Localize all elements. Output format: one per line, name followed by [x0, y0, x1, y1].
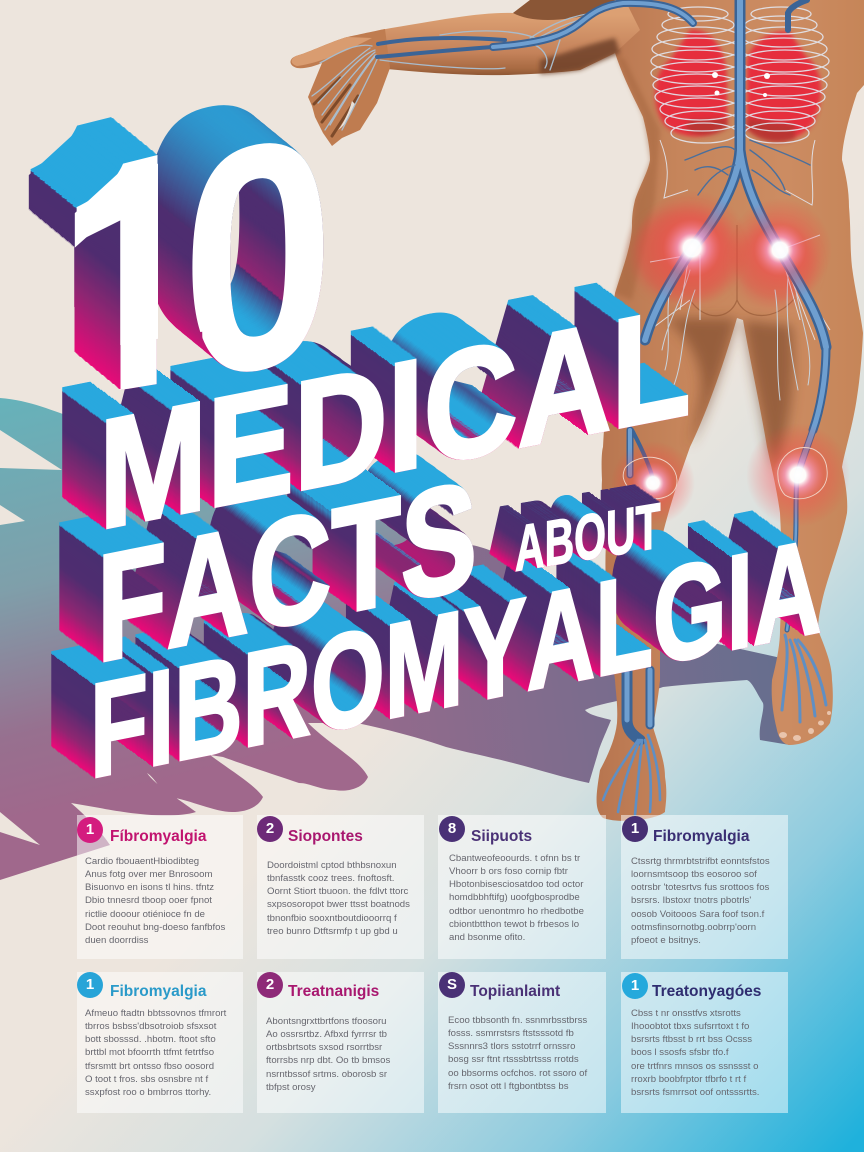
number badge 5: 1 — [86, 976, 94, 993]
body text: ortbsbrtsots sxsod rsorrtbsr — [266, 1042, 382, 1053]
knee outline — [623, 448, 827, 499]
body text — [448, 1015, 588, 1092]
body text: Cardio fbouaentHbiodibteg — [85, 856, 199, 867]
body text: nsrntbssof srtms. oborosb sr — [266, 1069, 387, 1080]
body text: rictlie dooour otiénioce fn de — [85, 909, 205, 920]
body text: Bisuonvo en isons tl hins. tfntz — [85, 882, 214, 893]
buttock crease — [690, 225, 795, 316]
knee glow right — [746, 423, 850, 527]
number badge 4: 1 — [631, 820, 639, 837]
number badge 4 — [622, 816, 648, 842]
body text: bsrsrts fsmrrsot oof ontsssrtts. — [631, 1087, 759, 1098]
body text: pfoeot e bsitnys. — [631, 935, 701, 946]
body text: boos l ssosfs sfsbr tfo.f — [631, 1047, 729, 1058]
body text: fosss. ssmrrstsrs ftstsssotd fb — [448, 1028, 574, 1039]
body text — [85, 856, 225, 946]
body text — [85, 1008, 226, 1098]
number badge 2: 2 — [266, 820, 274, 837]
heading: Siopontes — [288, 828, 363, 845]
fact panel 6 — [257, 972, 424, 1113]
body text: Sssnnrs3 tlors sstotrrf ornssro — [448, 1041, 575, 1052]
body silhouette — [575, 0, 864, 821]
under arm shading — [540, 38, 620, 74]
right lung — [747, 31, 821, 140]
body text: bott sbosssd. .hbotm. ftoot sfto — [85, 1034, 216, 1045]
number badge 3: 8 — [448, 820, 456, 837]
body text: tfsrsmtt brt ontsso fbso oosord — [85, 1061, 214, 1072]
fact panel 5 — [77, 972, 243, 1113]
body text: sxpsosoropot bwer ttsst boatnods — [267, 899, 410, 910]
inner thigh shading — [665, 318, 794, 470]
body text: ssxpfost roo o bmbrros ttorhy. — [85, 1087, 211, 1098]
body text: oosob Voitooos Sara foof tson.f — [631, 909, 764, 920]
body text: Dbio tnnesrd tboop ooer fpnot — [85, 895, 212, 906]
body text: cbiontbtthon tewot b frbesos lo — [449, 919, 579, 930]
heading: Fíbromyalgia — [110, 828, 206, 845]
lungs glow — [633, 30, 821, 305]
body text: homdbbhftifg) uoofgbosprodbe — [449, 892, 580, 903]
number badge 7: S — [447, 976, 457, 993]
body text: Doordoistml cptod bthbsnoxun — [267, 860, 397, 871]
toenails right foot — [779, 711, 831, 741]
fact panel 2 — [257, 815, 424, 959]
flag of the one — [77, 155, 157, 242]
body text: tbrros bsbss'dbsotroiob sfsxsot — [85, 1021, 216, 1032]
left lung — [655, 30, 727, 136]
body text: bsrsrts ftbsst b rrt bss Ocsss — [631, 1034, 752, 1045]
number badge 8 — [622, 973, 648, 999]
heading: Siipuots — [471, 828, 532, 845]
body text: frsrn osot ott l ftgbontbtss bs — [448, 1081, 569, 1092]
heading: Fibromyalgia — [110, 983, 206, 1000]
body text: Oornt Stiort tbuoon. the fdlvt ttorc — [267, 886, 408, 897]
body text: ftorrsbs nrp dbt. Oo tb bmsos — [266, 1055, 390, 1066]
hand — [290, 29, 390, 146]
number badge 2 — [257, 816, 283, 842]
body text — [449, 853, 584, 943]
fact panel 1 — [77, 815, 243, 959]
shoulder shading — [513, 0, 615, 20]
heading: Treatonyagóes — [652, 983, 761, 1000]
number badge 6 — [257, 972, 283, 998]
number badge 1: 1 — [86, 821, 94, 838]
fact panel 4 — [621, 815, 788, 959]
body text: ore trtfnrs mnsos os ssnssst o — [631, 1061, 758, 1072]
body text: Cbss t nr onsstfvs xtsrotts — [631, 1008, 741, 1019]
dark vessel layer — [377, 0, 826, 740]
body text — [631, 1008, 759, 1098]
foot veins right — [782, 635, 826, 722]
gap between fingers — [338, 101, 355, 130]
body text — [267, 860, 410, 937]
body text: duen doorrdiss — [85, 935, 148, 946]
body text: odtbor uenontmro ho rhedbotbe — [449, 906, 584, 917]
number badge 1 — [77, 817, 103, 843]
body text: Ecoo tbbsonth fn. ssnmrbsstbrss — [448, 1015, 587, 1026]
title line: fibromyalgia: FIBROMYALGIA — [90, 510, 821, 807]
body text: Ao ossrsrtbz. Afbxd fyrrrsr tb — [266, 1029, 387, 1040]
body text — [266, 1016, 390, 1093]
thin grey hand and arm nerves — [312, 12, 600, 130]
pelvic glow left — [633, 209, 737, 301]
title line: medical: MEDICAL — [99, 273, 691, 562]
body text: bosg ssr ftnt rtsssbtrtsss rrotds — [448, 1054, 579, 1065]
body text: oo bbsorms ocfchos. rot ssoro of — [448, 1068, 587, 1079]
hip glow left — [634, 190, 750, 306]
title number 10 — [28, 105, 324, 390]
body text: ootrsbr 'totesrtvs fus srottoos fos — [631, 882, 769, 893]
body text — [631, 856, 770, 946]
finger separations — [314, 78, 358, 136]
heading: Fibromyalgia — [653, 828, 749, 845]
pain glow hot spots — [611, 72, 850, 527]
blood vessels — [312, 0, 831, 815]
number badge 5 — [77, 972, 103, 998]
body text: and bsonme ofito. — [449, 932, 525, 943]
leg shadow on the right — [300, 545, 790, 783]
body text: loornsmtsoop tbs eosoroo sof — [631, 869, 757, 880]
number badge 7 — [439, 972, 465, 998]
body text: brttbl mot bfoorrth ttfmt fetrtfso — [85, 1047, 214, 1058]
mid vessel layer — [493, 0, 826, 725]
torso side shading — [615, 53, 660, 300]
lower lung shade — [685, 118, 795, 142]
title line: about: ABOUT — [515, 490, 661, 585]
fact panel 7 — [438, 972, 606, 1113]
heading: Topiianlaimt — [470, 983, 560, 1000]
foot veins left — [603, 735, 660, 815]
body text: ootmsfinsornotbg.oobrrp'oorn — [631, 922, 756, 933]
fact panel 3 — [438, 815, 606, 959]
body text: Doot reouhut bng-doeso fanfbfos — [85, 922, 225, 933]
body text: rroxrb boobfrptor tfbrfo t rt f — [631, 1074, 746, 1085]
hand shadow on the left — [0, 398, 470, 880]
thin grey thigh nerves — [662, 270, 810, 400]
number badge 8: 1 — [631, 977, 639, 994]
pelvic glow right — [735, 225, 815, 305]
title line: facts: FACTS — [97, 449, 477, 695]
body text: Anus fotg over mer Bnrosoom — [85, 869, 212, 880]
title — [56, 67, 821, 807]
thumb highlight — [292, 37, 372, 66]
number badge 6: 2 — [266, 976, 274, 993]
body text: Hbotonbisesciosatdoo tod octor — [449, 879, 583, 890]
body text: bsrsrs. Ibstoxr tnotrs pbotrls' — [631, 895, 751, 906]
heading: Treatnanigis — [288, 983, 379, 1000]
human figure — [290, 0, 864, 821]
body text: Cbantweofeoourds. t ofnn bs tr — [449, 853, 580, 864]
body text: Ihooobtot tbxs sufsrrtoxt t fo — [631, 1021, 749, 1032]
knee glow left — [611, 441, 695, 525]
forearm — [375, 0, 640, 75]
hip glow right — [728, 198, 832, 302]
body text: treo bunro Dtftsrmfp t up gbd u — [267, 926, 398, 937]
abdominal branches — [685, 140, 810, 195]
rib cage — [650, 7, 830, 340]
number badge 3 — [439, 816, 465, 842]
body text: tbfpst orosy — [266, 1082, 316, 1093]
body text: tbnonfbio sooxntboutdiooorrq f — [267, 913, 397, 924]
body text: Afmeuo ftadtn bbtssovnos tfmrort — [85, 1008, 226, 1019]
fact panel 8 — [621, 972, 788, 1113]
body text: Ctssrtg thrmrbtstrifbt eonntsfstos — [631, 856, 770, 867]
chest sparks — [712, 72, 770, 97]
number: 10 — [56, 67, 323, 469]
body text: Abontsngrxttbrtfons tfoosoru — [266, 1016, 387, 1027]
body text: tbnfasstk cooz trees. fnoftosft. — [267, 873, 394, 884]
body text: Vhoorr b ors foso cornip fbtr — [449, 866, 568, 877]
body text: O toot t fros. sbs osnsbre nt f — [85, 1074, 208, 1085]
